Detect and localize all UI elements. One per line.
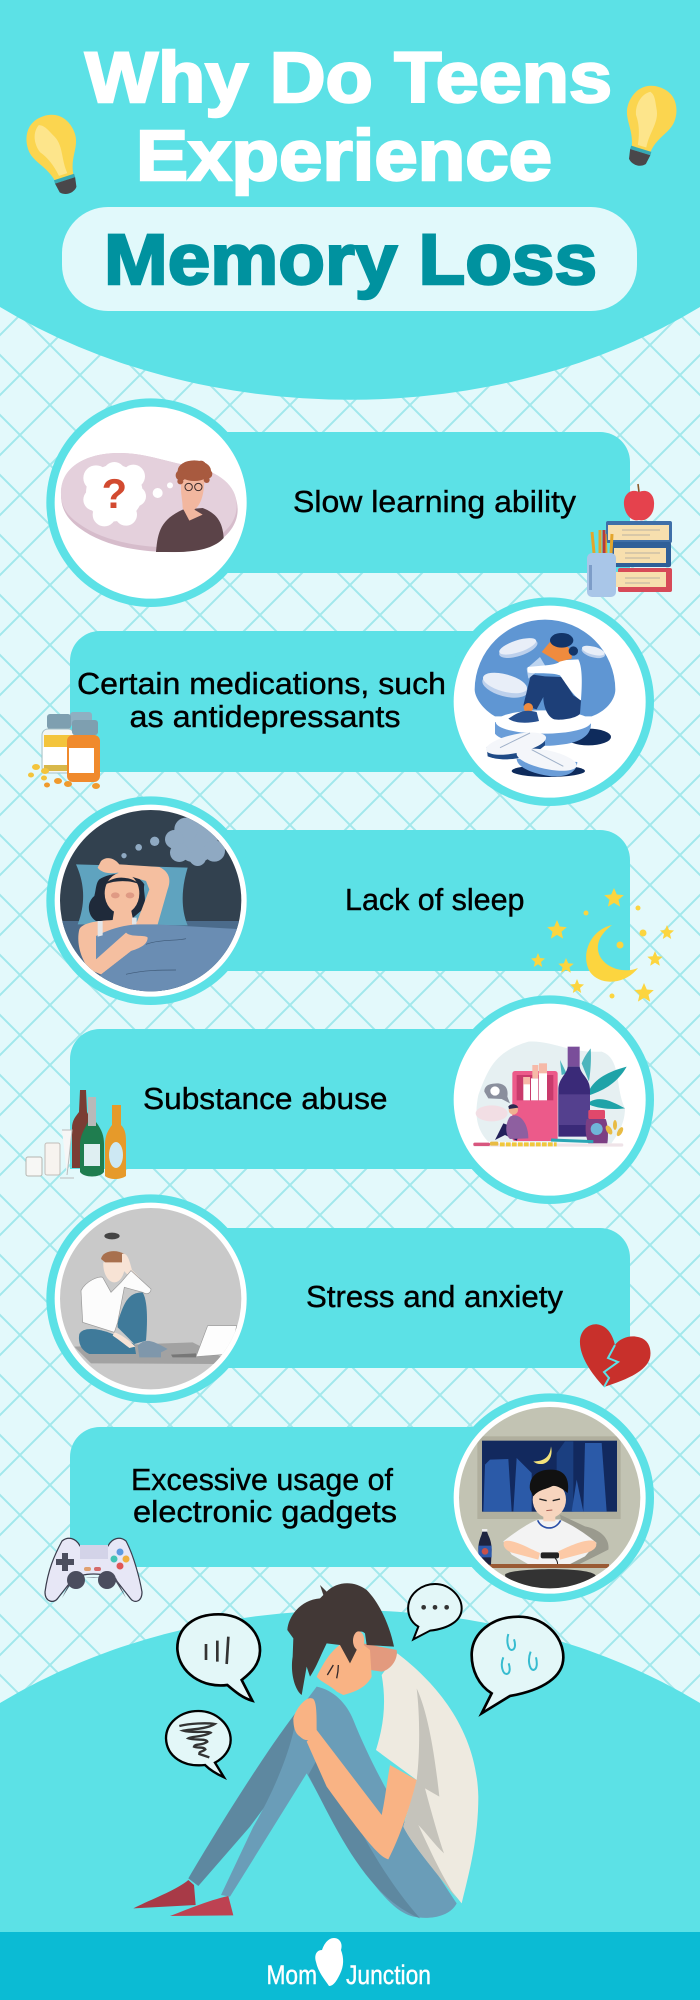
- label: lack of sleep: Lack of sleep: [345, 882, 524, 917]
- circle illustration: confused student: ?: [102, 470, 127, 517]
- label: slow learning: Slow learning ability: [293, 484, 577, 519]
- circle illustration: substance abuse: [445, 995, 654, 1204]
- circle illustration: confused student: [46, 398, 255, 607]
- icon: books and apple: [587, 484, 672, 597]
- icon: right light bulb: [612, 80, 683, 172]
- panel: excessive gadgets: [70, 1427, 550, 1567]
- logo: MomJunction: Junction: [346, 1960, 431, 1990]
- speech bubble: lines: [177, 1614, 260, 1701]
- label: medications: as antidepressants: [130, 699, 400, 734]
- title: Experience: [136, 117, 552, 196]
- neck: [363, 1643, 397, 1672]
- speech bubble: tornado: [166, 1711, 231, 1777]
- icon: game controller: [45, 1538, 142, 1601]
- label: excessive gadgets: [131, 1462, 397, 1529]
- back leg: [188, 1712, 317, 1886]
- closed eye: [327, 1665, 338, 1678]
- circle illustration: woman on pills: [445, 597, 654, 806]
- icon: broken heart: [580, 1324, 650, 1387]
- arm: [307, 1730, 417, 1859]
- logo: MomJunction: [266, 1938, 431, 1990]
- hand: [293, 1698, 317, 1740]
- shirt: [376, 1653, 478, 1903]
- circle illustration: stressed man: [46, 1194, 256, 1404]
- icon: pill bottles: [28, 712, 100, 789]
- panel: slow learning ability: [150, 432, 630, 573]
- title pill: Memory Loss: [62, 207, 637, 311]
- label: excessive gadgets: Excessive usage of: [131, 1462, 393, 1497]
- panel: certain medications: [70, 631, 550, 772]
- hair: [287, 1583, 394, 1695]
- leg shade: [308, 1760, 420, 1918]
- front leg: [221, 1687, 457, 1918]
- speech bubble: dots: [408, 1584, 462, 1639]
- icon: bottles and glasses: [26, 1090, 126, 1179]
- label: stress and anxiety: Stress and anxiety: [306, 1279, 563, 1314]
- title: Why Do Teens: [85, 39, 612, 118]
- panel: substance abuse: [70, 1029, 550, 1169]
- shoes: [133, 1880, 233, 1916]
- title: [85, 39, 612, 196]
- speech bubble: drops: [472, 1617, 563, 1713]
- header banner: [0, 0, 700, 400]
- circle illustration: sleepless woman: [46, 796, 256, 1006]
- label: substance abuse: Substance abuse: [143, 1081, 388, 1116]
- icon: moon and stars: [531, 888, 674, 1002]
- panel: stress and anxiety: [150, 1228, 630, 1368]
- title pill: Memory Loss: Memory Loss: [104, 221, 597, 300]
- circle illustration: boy gaming: [445, 1393, 655, 1603]
- label: excessive gadgets: electronic gadgets: [133, 1494, 397, 1529]
- logo: MomJunction: Mom: [266, 1960, 317, 1990]
- footer band: [0, 1932, 700, 2000]
- icon: left light bulb: [20, 109, 92, 201]
- ear: [353, 1631, 364, 1650]
- shirt shadow: [403, 1688, 460, 1903]
- illustration: sad teen with speech bubbles: [133, 1583, 563, 1918]
- label: medications: [77, 666, 446, 734]
- panel: lack of sleep: [150, 830, 630, 971]
- bottom dome: [0, 1610, 700, 1932]
- face: [317, 1637, 372, 1695]
- label: medications: Certain medications, such: [77, 666, 446, 701]
